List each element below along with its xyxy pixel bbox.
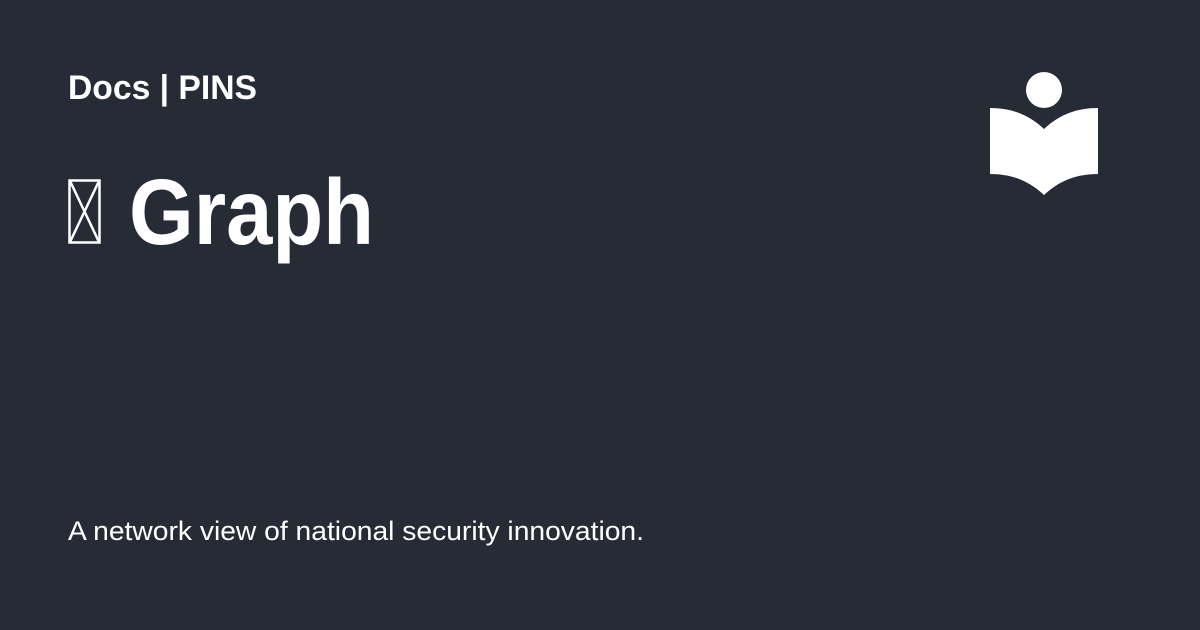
icon: missing glyph box [70,180,100,242]
title: Graph [129,160,374,264]
description: A network view of national security innovation. [68,516,644,546]
site name: Docs | PINS [68,69,257,107]
icon: book reader logo [990,72,1098,195]
